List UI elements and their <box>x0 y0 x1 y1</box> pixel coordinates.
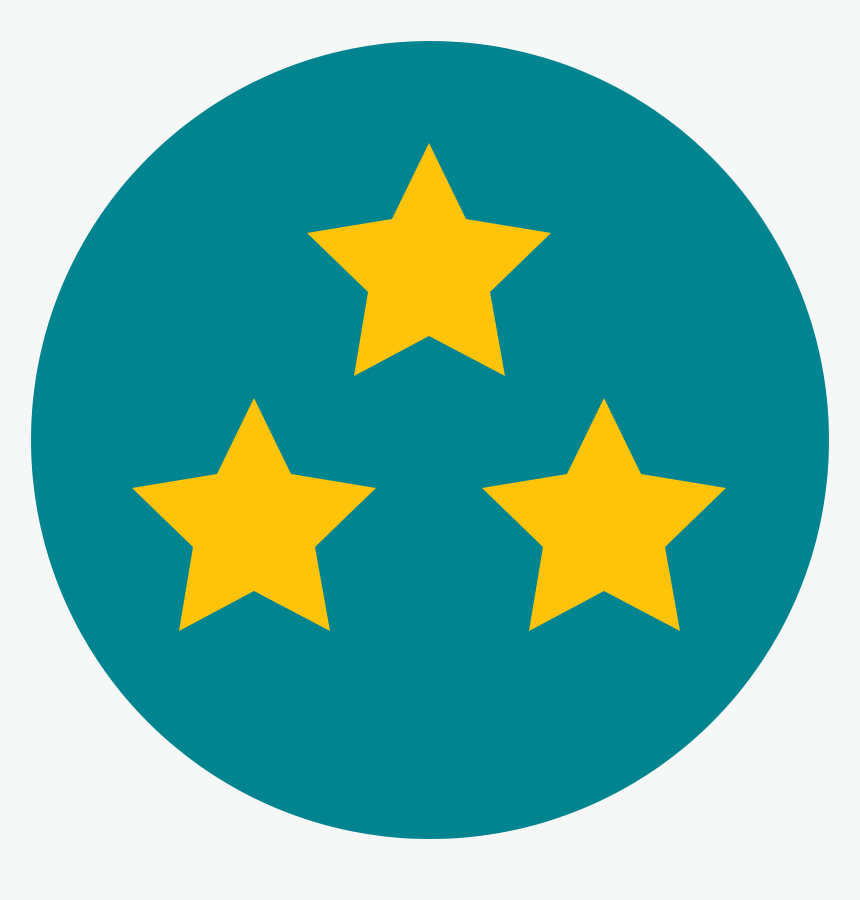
star: bottom left <box>132 398 376 631</box>
star: top <box>307 143 551 376</box>
star: bottom right <box>482 398 726 631</box>
stars group <box>132 143 726 631</box>
